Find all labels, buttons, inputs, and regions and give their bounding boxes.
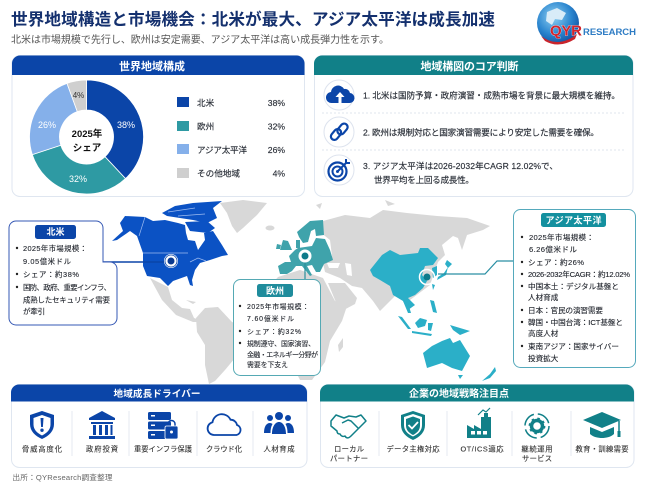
panel: core judgments xyxy=(314,56,633,196)
driver: government investment: 政府投資 xyxy=(86,444,118,454)
panel header: strategy focus xyxy=(320,384,634,402)
driver: cloud adoption: クラウド化 xyxy=(206,444,243,454)
source note: 出所：QYResearch調査整理 xyxy=(12,472,113,482)
callout text: Europe: シェア：約32% xyxy=(247,327,301,336)
legend: 38% xyxy=(268,98,285,108)
panel: regional growth drivers xyxy=(11,384,307,468)
callout pill: North America: 北米 xyxy=(46,226,65,237)
connector: Asia-Pacific xyxy=(438,261,513,274)
connector: Europe xyxy=(304,262,306,280)
strategy: OT/ICS adaptation xyxy=(460,408,504,454)
callout text: Europe: 2025年市場規模： xyxy=(247,302,309,311)
strategy: local partners: パートナー xyxy=(330,454,368,463)
legend: アジア太平洋 xyxy=(197,144,247,155)
callout text: Europe: 需要を下支え xyxy=(247,360,288,369)
legend: 欧州 xyxy=(197,120,214,132)
judgment 3 xyxy=(363,160,558,185)
driver: threat escalation: 脅威高度化 xyxy=(22,444,63,454)
map marker: Asia-Pacific xyxy=(420,270,434,284)
map marker: North America xyxy=(164,254,178,268)
strategy: continuous operation services: サービス xyxy=(522,454,552,463)
legend: その他地域 xyxy=(197,168,240,178)
judgment 3: 世界平均を上回る成長性。 xyxy=(374,174,474,185)
strategy: continuous operation services: 継続運用 xyxy=(522,444,552,454)
strategy: data sovereignty xyxy=(386,411,440,454)
callout text: North America: 成熟したセキュリティ需要 xyxy=(23,296,111,304)
map: Asia-Pacific xyxy=(370,248,496,381)
panel: corporate regional strategy focus xyxy=(320,384,634,468)
callout text: Asia-Pacific: 中国本土：デジタル基盤と xyxy=(528,281,619,291)
donut chart: 2025 share: シェア xyxy=(73,143,102,154)
judgment 3: 3. アジア太平洋は2026-2032年CAGR 12.02%で、 xyxy=(363,160,558,171)
callout pill: Europe: 欧州 xyxy=(266,285,284,296)
callout text: Asia-Pacific: 東南アジア：国家サイバー xyxy=(528,341,619,351)
callout text: Asia-Pacific: 2025年市場規模： xyxy=(529,232,594,242)
callout text: Europe: 7.60億米ドル xyxy=(247,314,294,323)
legend: 北米 xyxy=(197,97,215,108)
heading: core judgments: 地域構図のコア判断 xyxy=(420,59,518,73)
callout text: Europe: 金融・エネルギー分野が xyxy=(247,350,318,359)
callout text: Asia-Pacific: 韓国・中国台湾：ICT基盤と xyxy=(528,317,623,327)
callout text: Asia-Pacific: 高度人材 xyxy=(528,328,559,338)
driver: threat escalation xyxy=(22,411,63,454)
strategy: OT/ICS adaptation: OT/ICS適応 xyxy=(460,444,504,454)
callout text: North America: 国防、政府、重要インフラ、 xyxy=(23,283,111,292)
callout text: North America: シェア：約38% xyxy=(23,270,79,279)
heading: regional composition: 世界地域構成 xyxy=(119,59,185,73)
strategy: continuous operation services xyxy=(522,414,552,463)
logo: QYR Research: QYR xyxy=(550,22,582,40)
legend: 4% xyxy=(273,168,285,178)
callout text: Asia-Pacific: 2026-2032年CAGR：約12.02% xyxy=(528,269,630,279)
legend xyxy=(177,97,285,178)
logo: QYR Research: RESEARCH xyxy=(583,27,636,38)
strategy: data sovereignty: データ主権対応 xyxy=(386,444,440,454)
map: Europe xyxy=(276,220,333,276)
subtitle: 北米は市場規模で先行し、欧州は安定需要、アジア太平洋は高い成長弾力性を示す。 xyxy=(11,33,389,46)
panel header: core judgments xyxy=(314,56,633,75)
donut chart: 2025 share: 38% xyxy=(117,120,135,130)
driver: talent development xyxy=(264,412,294,454)
strategy: education and training demand: 教育・訓練需要 xyxy=(576,444,628,454)
driver: government investment xyxy=(86,411,118,454)
driver: cloud adoption xyxy=(206,414,243,454)
legend: 32% xyxy=(268,122,285,132)
callout text: Asia-Pacific: 日本：官民の演習需要 xyxy=(528,305,603,315)
callout text: Asia-Pacific xyxy=(521,232,630,363)
judgment 1: 1. 北米は国防予算・政府演習・成熟市場を背景に最大規模を維持。 xyxy=(363,90,620,100)
icon: chain link xyxy=(324,117,354,147)
judgment 2: 2. 欧州は規制対応と国家演習需要により安定した需要を確保。 xyxy=(363,126,599,138)
callout text: Asia-Pacific: 投資拡大 xyxy=(528,353,559,363)
strategy: local partners xyxy=(330,415,368,463)
panel: regional composition xyxy=(12,56,304,196)
icon: cloud upload xyxy=(324,80,355,110)
callout pill: Asia-Pacific: アジア太平洋 xyxy=(546,214,602,226)
strategy: education and training demand xyxy=(576,412,628,454)
icon: target xyxy=(324,155,354,185)
map marker: Europe xyxy=(298,250,312,262)
callout text: Europe xyxy=(239,302,318,369)
heading: growth drivers: 地域成長ドライバー xyxy=(114,388,200,400)
panel header: growth drivers xyxy=(11,384,307,402)
donut chart: 2025 share xyxy=(30,80,144,194)
legend: 26% xyxy=(268,145,285,155)
connector: North America xyxy=(103,261,171,263)
heading: strategy focus: 企業の地域戦略注目点 xyxy=(409,387,509,400)
donut chart: 2025 share: 32% xyxy=(69,174,87,184)
callout text: North America: が牽引 xyxy=(23,307,45,316)
driver: talent development: 人材育成 xyxy=(264,444,294,454)
callout: Asia-Pacific xyxy=(420,210,636,368)
logo: QYR Research xyxy=(537,2,636,45)
donut chart: 2025 share: 4% xyxy=(73,91,84,100)
map: grey rest of world xyxy=(150,200,490,384)
donut chart: 2025 share: 2025年 xyxy=(72,128,103,140)
callout text: North America: 2025年市場規模： xyxy=(23,244,87,253)
callout text: North America xyxy=(16,244,111,316)
callout pill: North America xyxy=(35,225,76,239)
map: North America xyxy=(112,201,228,286)
strategy: local partners: ローカル xyxy=(334,444,364,454)
world map xyxy=(112,200,496,384)
panel header: regional composition xyxy=(12,56,304,75)
callout text: Asia-Pacific: 人材育成 xyxy=(528,292,559,302)
title: 世界地域構造と市場機会：北米が最大、アジア太平洋は成長加速 xyxy=(11,9,495,29)
callout: North America xyxy=(9,221,178,325)
driver: critical infrastructure protection xyxy=(134,412,193,454)
driver: critical infrastructure protection: 重要インフラ保護 xyxy=(134,444,193,454)
callout text: North America: 9.05億米ドル xyxy=(23,257,72,266)
callout text: Asia-Pacific: シェア：約26% xyxy=(528,257,584,267)
callout text: Europe: 規制遵守、国家演習、 xyxy=(247,339,315,348)
callout: Europe xyxy=(234,250,320,376)
callout text: Asia-Pacific: 6.26億米ドル xyxy=(529,244,577,254)
donut chart: 2025 share: 26% xyxy=(38,120,56,130)
callout pill: Asia-Pacific xyxy=(541,213,606,227)
